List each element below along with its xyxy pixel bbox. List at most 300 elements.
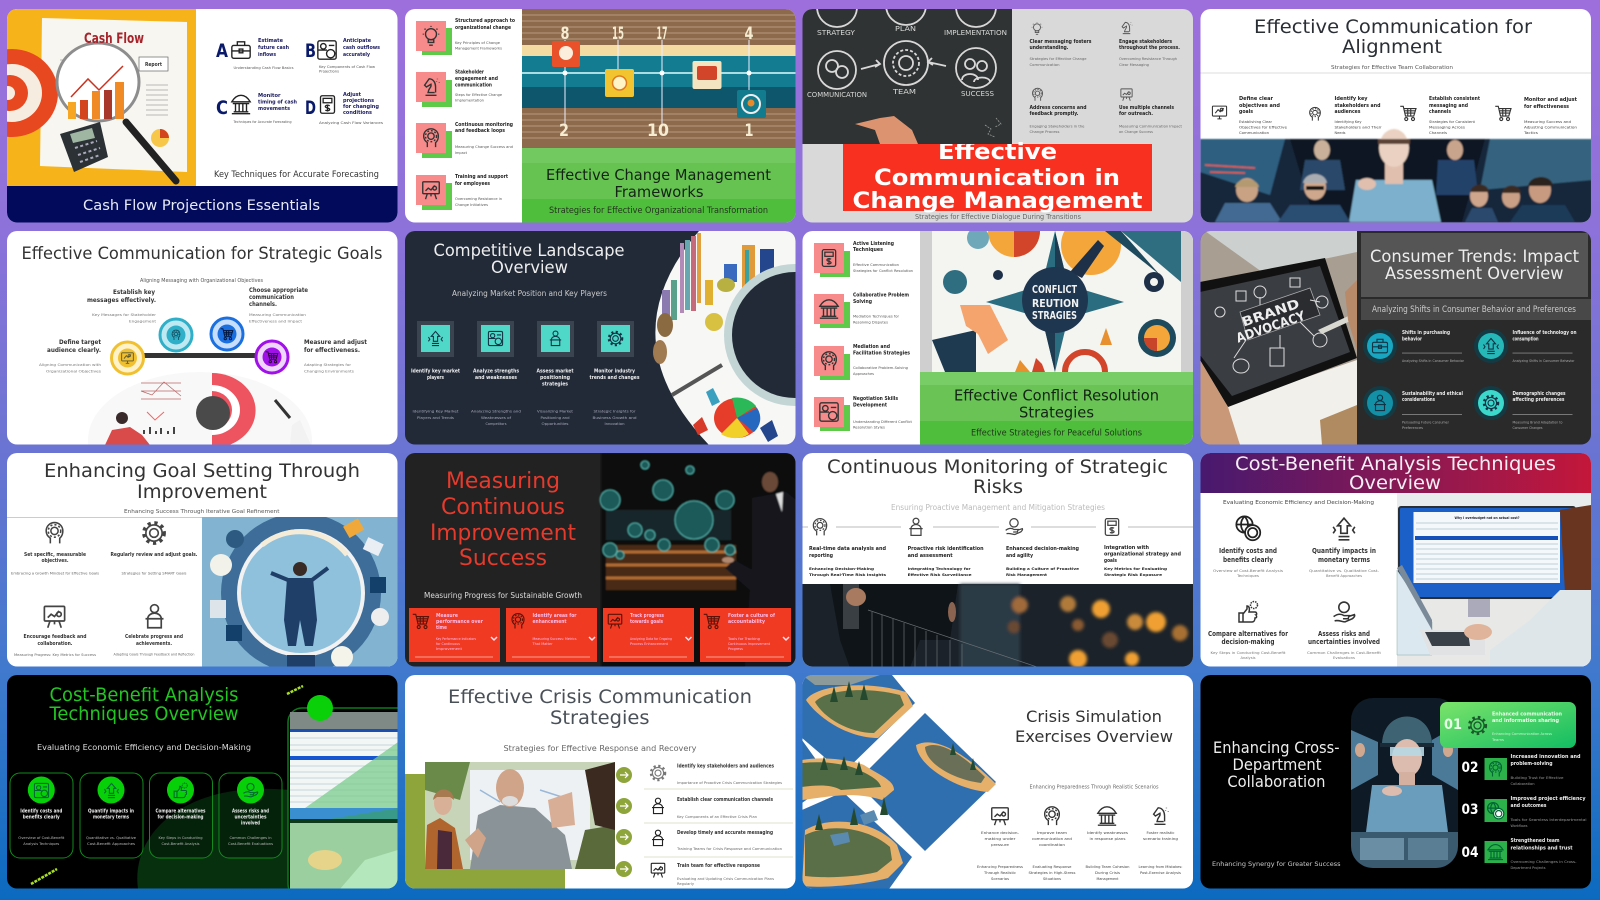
item: continuous monitoring: Measuring Change Success and: [455, 145, 513, 149]
card: quantify impacts: Cost-Benefit Approaches: [87, 842, 135, 846]
title: Success: [459, 546, 547, 571]
item: enhance decision-making: [977, 808, 1023, 881]
item: improve team communication: coordination: [1039, 843, 1066, 847]
chalkboard labels: IMPLEMENTATION: [944, 29, 1007, 37]
item: celebrate progress: achievements.: [136, 641, 172, 647]
item: celebrate progress: [114, 605, 195, 656]
item: compare alternatives: [1208, 602, 1289, 660]
item: set measurable objectives: Set specific, measurable: [24, 552, 86, 558]
item: collaborative problem solving: Mediation Techniques for: [853, 314, 899, 318]
item: consistent messaging: channels: [1429, 109, 1451, 115]
item: assess risks: [1307, 602, 1382, 660]
item: timely messaging: Training Teams for Crisis Response and Communication: [676, 847, 783, 851]
timeline numbers: [559, 24, 754, 141]
panel: Cost-Benefit Analysis Techniques Overview (white): [1200, 453, 1592, 668]
item 04: 04: [1462, 845, 1479, 861]
red title banner: [843, 140, 1152, 214]
item: identify stakeholders: stakeholders and: [1334, 103, 1381, 109]
item: address concerns: Engaging Stakeholders in the: [1030, 124, 1085, 128]
item: foster scenario training: [1138, 808, 1182, 875]
item C: monitor timing: Monitor: [258, 93, 281, 99]
background green blob: [137, 789, 290, 889]
item: address concerns: Change Process: [1030, 130, 1060, 134]
card: track progress: [603, 608, 694, 662]
card: compare alternatives: Cost-Benefit Analysis: [162, 842, 200, 846]
item: training and support: Training and support: [455, 174, 508, 180]
item: monitor trends: trends and changes: [590, 375, 640, 381]
text: Cash Flow photo label: Cash Flow: [84, 31, 144, 47]
subtitle box: [1361, 299, 1591, 320]
item: stakeholder engagement: Steps for Effective Change: [455, 93, 503, 97]
tablet label: ADVOCACY: [1234, 309, 1308, 347]
panel: Effective Conflict Resolution Strategies: [802, 205, 1194, 445]
card: track progress: Process Enhancement: [630, 642, 669, 646]
photo: tablet showing brand advocacy: [1200, 231, 1357, 445]
item B: anticipate outflows: accurately: [343, 52, 370, 58]
item: identify costs: benefits clearly: [1223, 556, 1273, 564]
subtitle: Enhancing Synergy for Greater Success: [1212, 860, 1341, 868]
item: define objectives: Objectives for Effective: [1239, 126, 1288, 130]
item: enhance decision-making: Scenarios: [991, 877, 1009, 881]
compass label: STRAGIES: [1032, 309, 1077, 322]
timeline numbers: 4: [744, 24, 754, 44]
panel: Measuring Continuous Improvement Success: [405, 453, 796, 667]
item: integration with strategy: organizational strategy and: [1104, 552, 1181, 558]
item: monitor and adjust: Monitor and adjust: [1524, 97, 1577, 103]
item: active listening: [814, 241, 914, 277]
title: Overview: [491, 258, 568, 278]
item D: adjust projections: D: [305, 97, 316, 119]
card: compare alternatives: Key Steps in Conducting: [158, 836, 202, 840]
phone mockup with spreadsheet: [288, 708, 418, 898]
item: clear messaging: [1030, 22, 1092, 67]
compass label: CONFLICT: [1032, 283, 1077, 296]
card: quantify impacts: Quantify impacts in: [88, 808, 134, 814]
item: analyze strengths: Weaknesses of: [481, 416, 512, 420]
title: Continuous Monitoring of Strategic: [827, 456, 1168, 478]
chalkboard labels: TEAM: [892, 88, 916, 96]
item: enhanced decision-making: Enhanced decision-making: [1006, 546, 1079, 552]
item: integration with strategy: [1104, 519, 1181, 577]
title: [1213, 738, 1340, 791]
item: sustainability: considerations: [1402, 397, 1435, 403]
card: quantify impacts: monetary terms: [93, 814, 129, 820]
item: define target audience: [39, 338, 102, 374]
photo: team discussion at whiteboard: [425, 762, 615, 869]
subtitle: Ensuring Proactive Management and Mitigation Strategies: [891, 503, 1105, 512]
card: assess risks: Cost-Benefit Evaluations: [228, 842, 273, 846]
panel: Cash Flow Projections Essentials: [0, 9, 398, 223]
item B: anticipate outflows: Projections: [319, 70, 339, 74]
item: enhanced decision-making: [1006, 519, 1080, 577]
timeline bar: [144, 353, 255, 358]
item: identify stakeholders: [1310, 96, 1382, 135]
item: active listening: Strategies for Conflict Resolution: [853, 269, 914, 273]
title: Crisis Simulation: [1026, 707, 1162, 726]
panel: Effective Communication for Strategic Goals: [7, 231, 398, 444]
item: training and support: Overcoming Resistance in: [455, 197, 503, 201]
title: Enhancing Cross-: [1213, 738, 1340, 757]
item: identify weaknesses: Identify weaknesses: [1087, 831, 1128, 835]
item: analyze strengths: and weaknesses: [475, 375, 517, 381]
item: identify weaknesses: [1086, 807, 1130, 881]
item: train team: Evaluating and Updating Crisis Communication Plans: [677, 877, 774, 881]
item: stakeholder engagement: communication: [455, 82, 492, 88]
item D: adjust projections: projections: [343, 98, 374, 104]
item: address concerns: feedback promptly.: [1030, 111, 1078, 117]
image: market analysis charts and magnifier: [653, 231, 866, 445]
item 03: and outcomes: [1510, 803, 1546, 809]
panel: Effective Change Management Frameworks: [405, 9, 796, 223]
item: monitor trends: Strategic Insights for: [594, 410, 636, 414]
item: identify market players: Players and Trends: [417, 416, 454, 420]
item: real-time analysis: Through Real-Time Risk Insights: [809, 573, 887, 577]
item: multiple channels: Use multiple channels: [1119, 105, 1174, 111]
item: monitor trends: Business Growth and: [592, 416, 636, 420]
card: track progress: towards goals: [630, 619, 663, 625]
item: consistent messaging: Establish consistent: [1429, 96, 1480, 102]
item C: monitor timing: C: [216, 97, 228, 119]
item: mediation and facilitation: Facilitation Strategies: [853, 350, 910, 356]
item: mediation and facilitation: Mediation and: [853, 344, 890, 350]
item 02: problem-solving: [1510, 761, 1553, 767]
card: compare alternatives: for decision-making: [158, 814, 204, 820]
chalkboard labels: [807, 25, 1007, 99]
item: consistent messaging: [1400, 96, 1480, 135]
item: clear messaging: Clear messaging fosters: [1030, 39, 1092, 45]
item: integration with strategy: goals: [1104, 558, 1117, 564]
item D: adjust projections: conditions: [343, 110, 372, 116]
item: structured approach: organizational change: [455, 25, 511, 31]
icon: teal ring node: [160, 319, 192, 351]
panel: Consumer Trends Impact Assessment Overview: [1200, 231, 1592, 445]
item: quantify impacts: monetary terms: [1318, 556, 1370, 564]
item: monitor and adjust: Tactics: [1523, 131, 1538, 135]
item: integration with strategy: Integration with: [1104, 545, 1149, 551]
item: clear messaging: understanding.: [1030, 45, 1068, 51]
item: establish key messages: messages effectively.: [87, 296, 156, 304]
item: proactive risk identification: and assessment: [908, 553, 953, 559]
subtitle: Evaluating Economic Efficiency and Decision-Making: [1223, 500, 1374, 506]
illustration: conflict resolution compass: [920, 205, 1194, 392]
item: monitor trends: [590, 321, 640, 426]
item: assess positioning: Assess market: [536, 369, 574, 375]
card: identify costs: Overview of Cost-Benefit: [18, 836, 65, 840]
item: shifts in purchasing: behavior: [1402, 336, 1422, 342]
item: demographic changes: Measuring Brand Adaptation to: [1512, 420, 1563, 424]
item A: estimate inflows: Understanding Cash Flow Basics: [234, 66, 294, 70]
subtitle: Analyzing Market Position and Key Players: [452, 289, 607, 298]
item: choose channels: Measuring Communication: [249, 313, 307, 317]
title block: Strategies: [1019, 404, 1094, 422]
card: track progress: Analyzing Data for Ongoing: [630, 637, 672, 641]
item: collaborative problem solving: Collaborative Problem: [853, 292, 909, 298]
item: active listening: Effective Communication: [853, 263, 900, 267]
item A: estimate inflows: [216, 38, 294, 70]
item: identify stakeholders: Identify key: [1334, 96, 1368, 102]
item: active listening: Active Listening: [853, 241, 894, 247]
title: [434, 241, 624, 278]
title: [1256, 19, 1532, 57]
item: engage stakeholders: [1119, 22, 1180, 67]
item: train team: Train team for effective response: [677, 863, 760, 869]
item 04: Department Projects: [1510, 866, 1546, 870]
title: Effective Crisis Communication: [448, 686, 752, 708]
item: structured approach: Management Frameworks: [455, 46, 502, 50]
item: assess positioning: strategies: [542, 382, 568, 388]
compass label: REUTION: [1032, 297, 1079, 310]
item: real-time analysis: [809, 519, 887, 577]
panel: Enhancing Cross-Department Collaboration: [1200, 675, 1592, 889]
item: identify weaknesses: in response plans: [1090, 837, 1126, 841]
photo: cash flow report with magnifier: [0, 9, 196, 186]
item: analyze strengths: Competitors: [486, 422, 507, 426]
item: identify stakeholders: [651, 764, 782, 785]
item: negotiation skills: Development: [853, 402, 887, 408]
item: measure and adjust: Changing Environments: [304, 370, 354, 374]
item: assess risks: Common Challenges in Cost-Benefit: [1307, 651, 1382, 655]
item: monitor and adjust: for effectiveness: [1524, 104, 1569, 110]
card: foster accountability: Tools for Tracking: [727, 637, 760, 641]
title: Continuous: [441, 495, 565, 520]
item: influence of technology: [1474, 329, 1577, 363]
subtitle: Evaluating Economic Efficiency and Decision-Making: [37, 743, 251, 752]
item 03: Workflows: [1510, 824, 1528, 828]
item: continuous monitoring: Impact: [455, 151, 468, 155]
item D: adjust projections: [305, 92, 383, 125]
subtitle: Aligning Messaging with Organizational Objectives: [140, 278, 263, 284]
item: compare alternatives: Compare alternatives for: [1208, 630, 1289, 638]
item: define target audience: audience clearly.: [47, 346, 101, 354]
timeline numbers: 15: [612, 24, 624, 44]
chalkboard labels: COMMUNICATION: [807, 91, 867, 99]
item: continuous monitoring: Continuous monitoring: [455, 122, 513, 128]
item: define objectives: Define clear: [1239, 96, 1273, 102]
item B: anticipate outflows: Key Components of Cash Flow: [319, 65, 375, 69]
item: establish key messages: Establish key: [113, 288, 156, 296]
item: identify stakeholders: Identifying Key: [1334, 120, 1362, 124]
item: monitor and adjust: Measuring Success and: [1524, 120, 1571, 124]
item: compare alternatives: decision-making: [1222, 638, 1275, 646]
subtitle: Enhancing Success Through Iterative Goal Refinement: [124, 509, 280, 515]
card: identify areas: Measuring Success: Metrics: [532, 637, 577, 641]
item: enhanced decision-making: Building a Culture of Proactive: [1006, 567, 1080, 571]
item: negotiation skills: Resolution Styles: [853, 426, 885, 430]
item: identify costs: Techniques: [1236, 574, 1259, 578]
item: measure and adjust: [304, 338, 367, 374]
item 04: relationships and trust: [1510, 846, 1573, 852]
item: proactive risk identification: [908, 518, 984, 577]
item A: estimate inflows: future cash: [258, 45, 289, 51]
item: influence of technology: Influence of technology on: [1512, 330, 1577, 336]
item: demographic changes: affecting preferences: [1512, 397, 1564, 403]
item: stakeholder engagement: Stakeholder: [455, 70, 484, 76]
card: foster accountability: [700, 608, 791, 662]
title: Department: [1232, 755, 1322, 774]
red title banner: Change Management: [852, 189, 1143, 214]
item: negotiation skills: Understanding Different Conflict: [853, 420, 913, 424]
red title banner: Communication in: [874, 166, 1120, 191]
title: [430, 469, 576, 571]
item: quantify impacts: Quantitative vs. Qualitative Cost-: [1309, 569, 1380, 573]
card: identify areas: [506, 608, 597, 662]
item 01: highlighted card: 01: [1444, 717, 1462, 733]
photo: businessman with city bokeh: [802, 584, 1194, 668]
item: foster scenario training: Foster realistic: [1146, 831, 1174, 835]
item B: anticipate outflows: Anticipate: [343, 38, 371, 44]
item 01: highlighted card: [1440, 702, 1576, 748]
panel: Crisis Simulation Exercises Overview: [802, 675, 1194, 889]
title block: Effective Change Management: [546, 166, 771, 184]
card: measure performance: [409, 608, 500, 662]
item: quantify impacts: Benefit Approaches: [1326, 574, 1362, 578]
item: identify stakeholders: Needs: [1334, 131, 1346, 135]
panel: Effective Communication for Alignment: [1200, 9, 1592, 223]
item: address concerns: [1030, 88, 1087, 134]
item B: anticipate outflows: [305, 38, 380, 74]
item: choose channels: communication: [249, 294, 294, 301]
chalkboard labels: PLAN: [895, 25, 916, 33]
card: measure performance: Improvement: [436, 647, 463, 651]
item: active listening: Techniques: [853, 247, 883, 253]
title banner: Cash Flow Projections Essentials: [83, 198, 320, 214]
item: identify weaknesses: Management: [1096, 877, 1119, 881]
item: integration with strategy: Strategic Risk Exposure: [1104, 573, 1163, 577]
item: choose channels: channels.: [249, 301, 277, 308]
item: identify stakeholders: Identify key stakeholders and audiences: [677, 764, 774, 770]
item: real-time analysis: Real-time data analysis and: [809, 546, 886, 552]
item: monitor and adjust: [1495, 97, 1578, 135]
card: identify areas: Identify areas for: [532, 613, 577, 619]
item: collaborative problem solving: Solving: [853, 299, 872, 305]
item: set measurable objectives: Embracing a Growth Mindset for Effective Goals: [11, 572, 99, 576]
item: consistent messaging: Messaging Across: [1429, 126, 1465, 130]
item: compare alternatives: Analysis: [1240, 656, 1256, 660]
subtitle: Strategies for Effective Team Collaboration: [1331, 65, 1454, 71]
item 04: Strengthened team: [1510, 838, 1560, 844]
subtitle: Measuring Progress for Sustainable Growth: [424, 591, 582, 600]
item: set measurable objectives: [11, 523, 99, 576]
timeline numbers: 8: [560, 24, 570, 44]
item C: monitor timing: timing of cash: [258, 100, 297, 106]
item: review and adjust: Regularly review and adjust goals.: [110, 552, 198, 558]
title block: Effective Strategies for Peaceful Solutions: [971, 429, 1143, 439]
card: identify costs: [10, 773, 73, 858]
item: negotiation skills: [814, 396, 913, 431]
card: assess risks: Assess risks and: [232, 808, 269, 814]
item C: monitor timing: Techniques for Accurate Forecasting: [233, 120, 292, 124]
item: improve team communication: [1028, 807, 1076, 881]
icon: blue ring node: [211, 318, 243, 350]
item: identify weaknesses: During Crisis: [1095, 871, 1120, 875]
timeline numbers: 17: [656, 24, 668, 44]
item: establish key messages: Key Messages for Stakeholder: [92, 313, 157, 317]
item: clear channels: [652, 797, 773, 819]
item: assess risks: Evaluations: [1333, 656, 1355, 660]
item D: adjust projections: for changing: [343, 104, 379, 110]
item: define objectives: Communication: [1239, 131, 1270, 135]
item: integration with strategy: Key Metrics for Evaluating: [1104, 567, 1167, 571]
title: Competitive Landscape: [434, 241, 624, 261]
list arrows: [616, 767, 632, 877]
item: define objectives: goals: [1239, 109, 1253, 115]
item: quantify impacts: Quantify impacts in: [1312, 547, 1376, 555]
timeline numbers: 1: [744, 121, 754, 141]
item 03: 03: [1462, 802, 1478, 818]
item 02: Building Trust for Effective: [1510, 776, 1564, 780]
item: assess positioning: Opportunities: [542, 422, 569, 426]
item: assess positioning: Visualizing Market: [537, 410, 574, 414]
title: [448, 686, 752, 729]
item: choose channels: Effectiveness and Impact: [249, 320, 303, 324]
item: mediation and facilitation: Collaborative Problem-Solving: [853, 366, 908, 370]
item: review and adjust: [110, 523, 198, 576]
card: foster accountability: Foster a culture of: [728, 613, 776, 619]
red title banner: Effective: [938, 140, 1057, 165]
item: enhance decision-making: pressure: [991, 843, 1010, 847]
item: train team: [651, 863, 774, 886]
title: Improvement: [137, 481, 267, 503]
item: shifts in purchasing: [1363, 329, 1464, 363]
item: sustainability: Persuading Future Consumer: [1402, 420, 1449, 424]
text: Report label: Report: [145, 62, 163, 68]
item 01: highlighted card: and information sharing: [1492, 718, 1559, 724]
subtitle: Strategies for Effective Response and Recovery: [504, 744, 697, 753]
timeline numbers: 10: [647, 121, 669, 141]
item: shifts in purchasing: Shifts in purchasing: [1402, 330, 1450, 336]
item: structured approach: [416, 18, 515, 55]
item: choose channels: Choose appropriate: [249, 287, 308, 294]
item: set measurable objectives: objectives.: [42, 558, 68, 564]
title: Cost-Benefit Analysis: [50, 684, 238, 706]
item: establish key messages: Engagement: [129, 320, 157, 324]
card: compare alternatives: [150, 773, 212, 858]
title: [49, 684, 238, 725]
title: Strategies: [550, 707, 650, 729]
panel: Enhancing Goal Setting Through Improvement: [7, 453, 398, 673]
item: identify costs: [1213, 516, 1283, 578]
item 02: Increased innovation and: [1510, 754, 1581, 760]
card: quantify impacts: [80, 773, 143, 858]
item: encourage feedback: Encourage feedback and: [24, 634, 87, 640]
item 01: highlighted card: Enhancing Communication Across: [1492, 732, 1552, 736]
title header: Cost-Benefit Analysis Techniques: [1235, 453, 1556, 475]
panel: Effective Crisis Communication Strategies: [405, 675, 796, 889]
item: measure and adjust: Adapting Strategies for: [304, 363, 352, 367]
item C: monitor timing: [216, 93, 297, 124]
item B: anticipate outflows: cash outflows: [343, 45, 380, 51]
item 02: 02: [1462, 760, 1478, 776]
item: assess positioning: Positioning and: [540, 416, 570, 420]
photo: chalkboard diagram: [802, 0, 1012, 144]
item: define objectives: objectives and: [1239, 103, 1280, 109]
title block: [920, 372, 1194, 445]
item: identify stakeholders: Importance of Proactive Crisis Communication Strategies: [677, 781, 782, 785]
item: mediation and facilitation: [814, 344, 910, 380]
green accent block: [405, 774, 565, 889]
item: proactive risk identification: Proactive risk identification: [908, 546, 984, 552]
title: Improvement: [430, 521, 576, 546]
item: consistent messaging: messaging and: [1429, 103, 1468, 109]
item: address concerns: Address concerns and: [1030, 105, 1087, 111]
item: training and support: for employees: [455, 181, 490, 187]
card: compare alternatives: Compare alternatives: [156, 808, 206, 814]
card: foster accountability: Continuous Improvement: [728, 642, 770, 646]
item: define target audience: Aligning Communication with: [39, 363, 102, 367]
title banner: [7, 186, 398, 223]
item: choose channels: [249, 287, 308, 324]
item: identify market players: players: [427, 375, 444, 381]
